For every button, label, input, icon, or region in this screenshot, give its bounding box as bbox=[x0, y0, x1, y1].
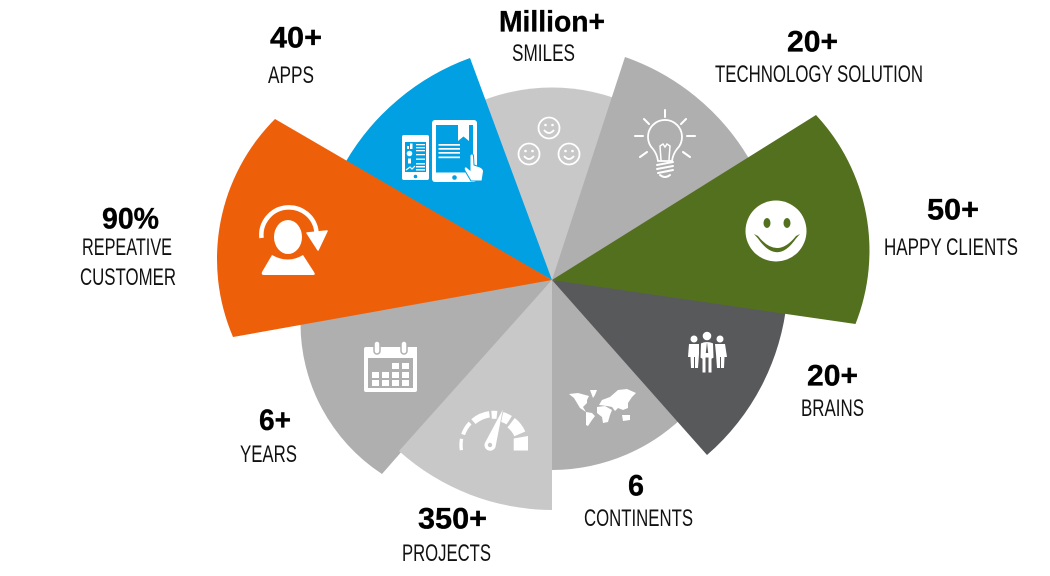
panel: apps bbox=[268, 22, 552, 280]
wedge: smiles bbox=[472, 88, 632, 280]
label: brains: BRAINS bbox=[801, 395, 864, 422]
value: 6: 6 bbox=[628, 470, 644, 502]
value: Million+: Million+ bbox=[499, 6, 605, 38]
label: repeative customer bbox=[80, 234, 176, 291]
panel: technology solution bbox=[552, 26, 923, 280]
label: projects: PROJECTS bbox=[402, 540, 491, 567]
icon: three smileys bbox=[518, 118, 580, 164]
wedge: repeative customer bbox=[217, 119, 552, 337]
value: 90%: 90% bbox=[102, 202, 159, 236]
value: 20+: 20+ bbox=[807, 360, 858, 392]
value: 6+: 6+ bbox=[259, 404, 291, 437]
icon: returning customer bbox=[261, 207, 327, 275]
wedge: technology solution bbox=[552, 57, 770, 280]
panel: happy clients bbox=[552, 115, 1018, 324]
panel: continents bbox=[552, 280, 693, 532]
value: 350+: 350+ bbox=[418, 502, 487, 536]
label: years: YEARS bbox=[240, 441, 297, 468]
panel: repeative customer bbox=[80, 119, 552, 337]
wedge: projects bbox=[399, 280, 552, 510]
icon: team of people bbox=[688, 332, 727, 373]
icon: world map bbox=[569, 389, 636, 426]
icon: big smiley bbox=[746, 200, 806, 262]
panel: brains bbox=[552, 280, 864, 455]
wedge: happy clients bbox=[552, 115, 869, 324]
wedge: brains bbox=[552, 280, 787, 455]
label: continents: CONTINENTS bbox=[584, 505, 693, 532]
icon: phone and tablet bbox=[402, 120, 484, 182]
label: repeative customer: CUSTOMER bbox=[80, 264, 176, 291]
value: 50+: 50+ bbox=[927, 194, 979, 226]
wedge: continents bbox=[552, 280, 690, 470]
wedge: years bbox=[300, 280, 552, 474]
panel: smiles bbox=[472, 6, 632, 280]
panel: projects bbox=[399, 280, 552, 567]
value: 40+: 40+ bbox=[270, 22, 322, 54]
icon: light bulb bbox=[635, 110, 695, 177]
wedge: apps bbox=[345, 58, 552, 280]
panel: years bbox=[240, 280, 552, 474]
icon: calendar bbox=[364, 341, 417, 392]
label: technology solution: TECHNOLOGY SOLUTION bbox=[715, 61, 923, 88]
value: 20+: 20+ bbox=[787, 26, 838, 58]
label: smiles: SMILES bbox=[512, 40, 575, 67]
label: apps: APPS bbox=[268, 62, 314, 89]
label: repeative customer: REPEATIVE bbox=[82, 234, 172, 261]
icon: speedometer bbox=[461, 407, 528, 451]
